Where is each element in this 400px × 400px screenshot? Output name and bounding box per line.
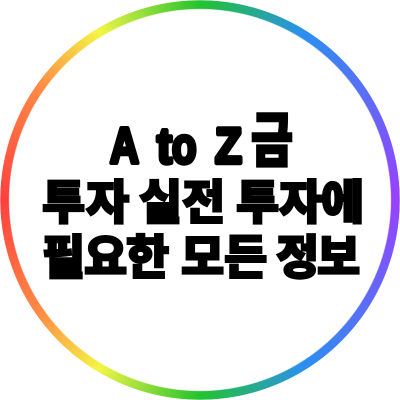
title line 1: A [110,118,139,174]
title line 1: o [172,118,196,174]
title line 2: 투자 실전 투자에 [42,176,364,229]
title line 1: Z [215,117,242,174]
title line 1 [110,108,293,175]
title line 1: t [157,119,172,175]
title line 1: 금 [251,108,293,174]
title line 3: 필요한 모든 정보 [42,231,360,284]
